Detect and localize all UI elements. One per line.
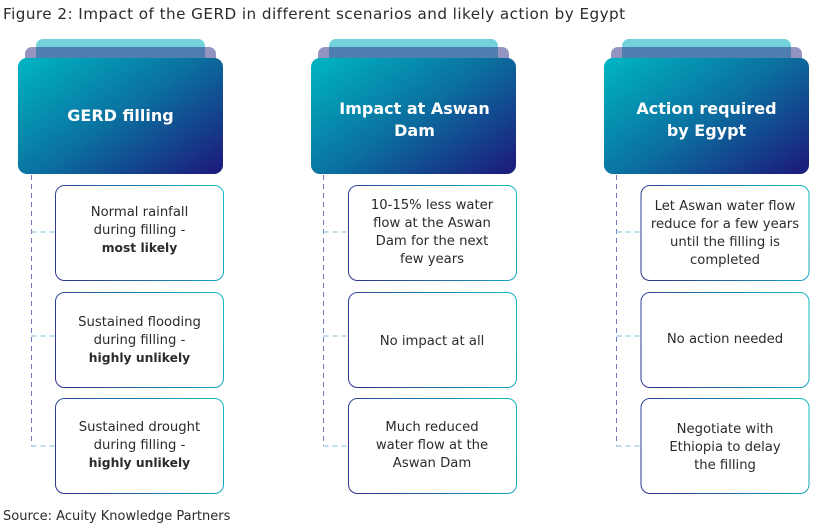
box: less water flow (348, 186, 516, 280)
panel: Impact at Aswan Dam (311, 39, 516, 494)
box: let flow reduce: Let Aswan water flow (655, 199, 796, 214)
source note: Source: Acuity Knowledge Partners (3, 509, 231, 524)
box: less water flow: 10-15% less water (371, 198, 494, 213)
box: sustained flooding: during filling - (94, 333, 186, 348)
panel: Action required by Egypt (604, 39, 809, 494)
box: less water flow: flow at the Aswan (373, 216, 491, 231)
header card: Impact at Aswan Dam (311, 39, 516, 174)
header card: Action required by Egypt: by Egypt (667, 121, 747, 140)
box: sustained flooding: highly unlikely (89, 351, 190, 365)
box: no action: No action needed (667, 332, 783, 347)
box: let flow reduce: reduce for a few years (651, 217, 799, 232)
connector lines (616, 175, 641, 446)
header card: Action required by Egypt: Action required (636, 99, 777, 118)
box: normal rainfall: during filling - (94, 223, 186, 238)
box: normal rainfall: Normal rainfall (91, 205, 188, 220)
panel: GERD filling (18, 39, 224, 494)
box: normal rainfall: most likely (102, 241, 177, 255)
box: no impact (348, 292, 516, 388)
box: much reduced flow: water flow at the (376, 438, 488, 453)
title: Figure 2: Impact of the GERD in different scenarios and likely action by Egypt (3, 5, 626, 23)
box: sustained drought: during filling - (94, 438, 186, 453)
box: much reduced flow (348, 398, 516, 494)
box: much reduced flow: Aswan Dam (393, 456, 471, 471)
box: no impact: No impact at all (380, 334, 484, 349)
box: no action (641, 292, 809, 388)
header card: GERD filling: GERD filling (67, 106, 174, 125)
box: less water flow: Dam for the next (376, 234, 488, 249)
box: negotiate: Ethiopia to delay (669, 440, 781, 455)
header card: GERD filling (18, 39, 223, 174)
box: let flow reduce: until the filling is (670, 235, 780, 250)
box: less water flow: few years (400, 252, 464, 267)
box: let flow reduce: completed (690, 253, 760, 268)
header card: Action required by Egypt (604, 39, 809, 174)
box: much reduced flow: Much reduced (385, 420, 479, 435)
box: negotiate (641, 398, 809, 494)
header card: Impact at Aswan Dam: Impact at Aswan (339, 99, 490, 118)
box: sustained flooding (56, 292, 224, 388)
box: sustained drought (56, 398, 224, 494)
box: normal rainfall (56, 186, 224, 280)
header card: Impact at Aswan Dam: Dam (394, 121, 435, 140)
box: negotiate: the filling (694, 458, 756, 473)
box: sustained drought: Sustained drought (79, 420, 200, 435)
connector lines (324, 175, 348, 446)
box: negotiate: Negotiate with (677, 422, 773, 437)
box: sustained drought: highly unlikely (89, 456, 190, 470)
box: let flow reduce (641, 186, 809, 280)
connector lines (32, 175, 55, 446)
box: sustained flooding: Sustained flooding (78, 315, 201, 330)
